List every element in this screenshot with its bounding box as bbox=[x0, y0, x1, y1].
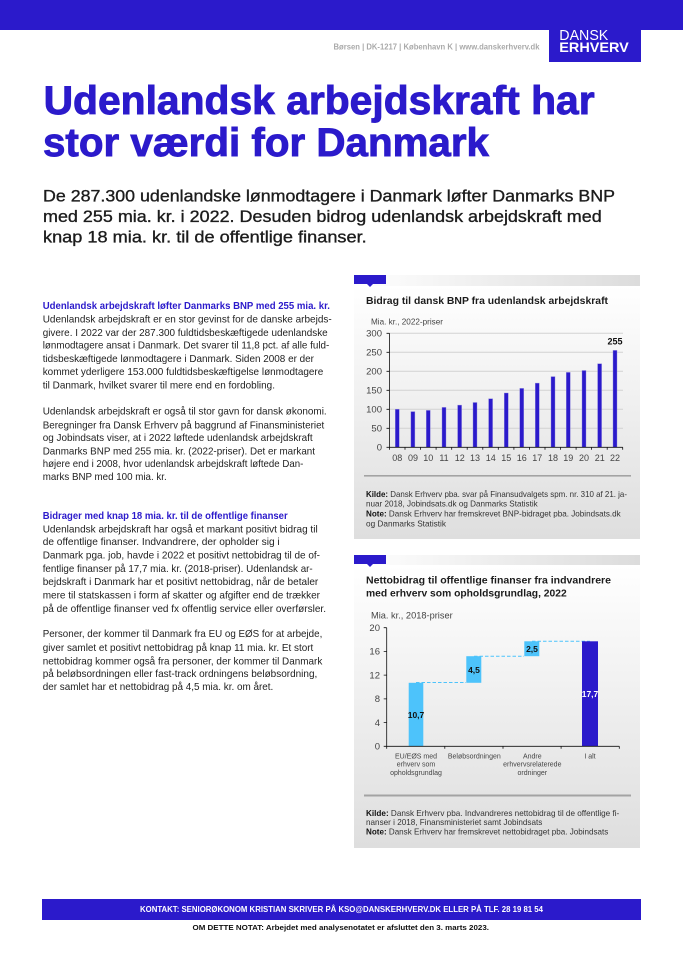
bar chart: BNP: 12 bbox=[455, 453, 465, 463]
text block: public finances section: på de offentlige finanser ved fx offentlig service eller overførsler. bbox=[43, 603, 326, 615]
text block: public finances section: mere til statskassen i form af skatter og afgifter end de trækker bbox=[43, 590, 321, 602]
bar chart: BNP bbox=[366, 329, 623, 463]
source note bbox=[366, 489, 627, 528]
waterfall chart: 8 bbox=[375, 694, 380, 705]
source note: Note: Dansk Erhverv har fremskrevet BNP-bidraget pba. Jobindsats.dk bbox=[366, 508, 622, 518]
bar chart: BNP: 16 bbox=[517, 453, 527, 463]
waterfall chart: erhverv som bbox=[397, 762, 435, 769]
bar chart: BNP: 08 bbox=[392, 453, 402, 463]
waterfall chart: 16 bbox=[369, 647, 380, 658]
bar chart: BNP: 300 bbox=[366, 329, 382, 340]
bar chart: BNP: 200 bbox=[366, 367, 382, 378]
intro text: knap 18 mia. kr. til de offentlige finanser. bbox=[43, 227, 367, 246]
bar chart: BNP: 20 bbox=[579, 453, 589, 463]
waterfall chart: 2,5 bbox=[526, 644, 538, 654]
bar chart: BNP: 150 bbox=[366, 386, 382, 397]
waterfall chart: 10,7 bbox=[408, 710, 425, 720]
logo: Dansk Erhverv: DANSK bbox=[559, 28, 609, 44]
text block: BNP section: Udenlandsk arbejdskraft er også til stor gavn for dansk økonomi. bbox=[43, 406, 327, 418]
chart title: Bidrag til dansk BNP fra udenlandsk arbejdskraft bbox=[366, 295, 608, 307]
bar chart: BNP: 09 bbox=[408, 453, 418, 463]
text block: public finances section: giver samlet et positivt nettobidrag på knap 11 mia. kr. Et stort bbox=[43, 642, 313, 654]
waterfall chart: ordninger bbox=[518, 770, 548, 777]
waterfall chart: EU/EØS med bbox=[395, 753, 437, 760]
intro text: De 287.300 udenlandske lønmodtagere i Danmark løfter Danmarks BNP bbox=[43, 187, 615, 206]
logo: Dansk Erhverv: ERHVERV bbox=[559, 39, 629, 55]
bar chart: BNP: 14 bbox=[486, 453, 496, 463]
bar: Andre ordninger bbox=[524, 641, 539, 656]
text block: public finances section: Danmark pga. job, havde i 2022 et positivt nettobidrag til de of- bbox=[43, 550, 320, 562]
bar chart: BNP: 22 bbox=[610, 453, 620, 463]
bar: EU/EØS bbox=[409, 683, 423, 746]
chart title bbox=[366, 574, 611, 599]
text block: public finances section: nettobidrag kommer også fra personer, der kommer til Danmark bbox=[43, 656, 323, 668]
text block: public finances section: bejdskraft i Danmark har et positivt nettobidrag, når de betaler bbox=[43, 576, 319, 588]
source note: og Danmarks Statistik bbox=[366, 518, 447, 528]
bar chart: BNP: 19 bbox=[563, 453, 573, 463]
text block: BNP section: Beregninger fra Dansk Erhverv på baggrund af Finansministeriet bbox=[43, 420, 324, 432]
bar chart: BNP: 0 bbox=[377, 443, 382, 454]
text block: BNP section: givere. I 2022 var der 287.300 fuldtidsbeskæftigede udenlandske bbox=[43, 328, 328, 339]
text block: public finances section: Personer, der kommer til Danmark fra EU og EØS for at arbejde, bbox=[43, 629, 322, 640]
top band bbox=[0, 0, 683, 30]
waterfall chart: Andre bbox=[523, 753, 542, 760]
source note bbox=[366, 808, 620, 836]
waterfall chart: I alt bbox=[584, 753, 596, 760]
text block: public finances section: der samlet har et nettobidrag på 4,5 mia. kr. om året. bbox=[43, 681, 273, 693]
waterfall chart bbox=[369, 623, 619, 777]
waterfall chart: 17,7 bbox=[582, 689, 599, 699]
bar: I alt bbox=[582, 641, 598, 746]
waterfall chart: opholdsgrundlag bbox=[390, 770, 442, 777]
bar chart: BNP: 17 bbox=[532, 453, 542, 463]
bar chart: BNP: 11 bbox=[439, 453, 449, 463]
text block: BNP section: Udenlandsk arbejdskraft er en stor gevinst for de danske arbejds- bbox=[43, 314, 332, 326]
footnote: OM DETTE NOTAT: Arbejdet med analysenotatet er afsluttet den 3. marts 2023. bbox=[192, 923, 489, 932]
text block: public finances section bbox=[43, 511, 326, 693]
bar chart: BNP: 13 bbox=[470, 453, 480, 463]
waterfall chart: Beløbsordningen bbox=[448, 753, 501, 760]
bar chart: BNP: 250 bbox=[366, 348, 382, 359]
source note: Kilde: Dansk Erhverv pba. svar på Finansudvalgets spm. nr. 310 af 21. ja- bbox=[366, 489, 627, 499]
text block: BNP section: til Danmark, hvilket svarer til mere end en fordobling. bbox=[43, 380, 275, 392]
panel: BNP chart bbox=[354, 275, 640, 539]
source note: Kilde: Dansk Erhverv pba. Indvandreres nettobidrag til de offentlige fi- bbox=[366, 808, 620, 818]
axis unit: Mia. kr., 2018-priser bbox=[371, 611, 453, 622]
waterfall chart: 4,5 bbox=[468, 665, 480, 675]
text block: BNP section: lønmodtagere ansat i Danmark. Det svarer til 11,8 pct. af alle fuld- bbox=[43, 340, 329, 352]
text block: BNP section: kommet yderligere 153.000 fuldtidsbeskæftigelse lønmodtagere bbox=[43, 367, 324, 378]
text block: BNP section: Danmarks BNP med 255 mia. kr. (2022-priser). Det er markant bbox=[43, 446, 315, 458]
waterfall chart: 4 bbox=[375, 718, 380, 729]
text block: public finances section: de offentlige finanser. Indvandrere, der opholder sig i bbox=[43, 537, 280, 548]
intro text bbox=[43, 187, 615, 246]
text block: BNP section: tidsbeskæftigede lønmodtagere i Danmark. Siden 2008 er der bbox=[43, 354, 315, 365]
source note: nanser i 2018, Finansministeriet samt Jobindsats bbox=[366, 817, 542, 827]
text block: BNP section: og Jobindsats viser, at i 2022 løftede udenlandsk arbejdskraft bbox=[43, 433, 313, 444]
waterfall chart: 20 bbox=[369, 623, 380, 634]
value label: 255: 255 bbox=[607, 336, 623, 346]
waterfall chart: 12 bbox=[369, 670, 380, 681]
bar chart: BNP: 50 bbox=[371, 424, 382, 435]
bar chart: BNP: 100 bbox=[366, 405, 382, 416]
text block: public finances section: fentlige finanser på 17,7 mia. kr. (2018-priser). Udenlandsk ar- bbox=[43, 563, 313, 575]
bar: Beløbsordningen bbox=[466, 656, 481, 683]
heading: public finances: Bidrager med knap 18 mia. kr. til de offentlige finanser bbox=[43, 511, 288, 522]
bar chart: BNP: 21 bbox=[595, 453, 605, 463]
chart title: med erhverv som opholdsgrundlag, 2022 bbox=[366, 587, 567, 599]
source note: nuar 2018, Jobindsats.dk og Danmarks Statistik bbox=[366, 499, 539, 509]
contact bar bbox=[42, 899, 641, 920]
text block: BNP section: højere end i 2008, hvor udenlandsk arbejdskraft løftede Dan- bbox=[43, 459, 303, 470]
text block: BNP section bbox=[43, 301, 332, 483]
text block: public finances section: på beløbsordningen eller fast-track ordningens beløbsordning, bbox=[43, 668, 317, 680]
logo: Dansk Erhverv bbox=[549, 28, 641, 62]
heading: BNP: Udenlandsk arbejdskraft løfter Danmarks BNP med 255 mia. kr. bbox=[43, 301, 330, 312]
bar chart: BNP: 10 bbox=[423, 453, 433, 463]
contact bar: KONTAKT: SENIORØKONOM KRISTIAN SKRIVER PÅ KSO@DANSKERHVERV.DK ELLER PÅ TLF. 28 19 81 54 bbox=[140, 905, 544, 914]
text block: public finances section: Udenlandsk arbejdskraft har også et markant positivt bidrag til bbox=[43, 524, 318, 536]
title bbox=[43, 79, 595, 165]
chart title: Nettobidrag til offentlige finanser fra indvandrere bbox=[366, 574, 611, 586]
bar chart: BNP: 15 bbox=[501, 453, 511, 463]
axis unit: Mia. kr., 2022-priser bbox=[371, 316, 443, 326]
text block: BNP section: marks BNP med 100 mia. kr. bbox=[43, 472, 167, 483]
panel: net contribution chart bbox=[354, 555, 640, 848]
title: stor værdi for Danmark bbox=[43, 121, 490, 165]
intro text: med 255 mia. kr. i 2022. Desuden bidrog udenlandsk arbejdskraft med bbox=[43, 207, 602, 226]
title: Udenlandsk arbejdskraft har bbox=[44, 79, 595, 123]
bar chart: BNP: 18 bbox=[548, 453, 558, 463]
source note: Note: Dansk Erhverv har fremskrevet nettobidraget pba. Jobindsats bbox=[366, 826, 608, 836]
waterfall chart: erhvervsrelaterede bbox=[503, 762, 562, 769]
address line: Børsen | DK-1217 | København K | www.danskerhverv.dk bbox=[334, 42, 540, 52]
waterfall chart: 0 bbox=[375, 742, 380, 753]
